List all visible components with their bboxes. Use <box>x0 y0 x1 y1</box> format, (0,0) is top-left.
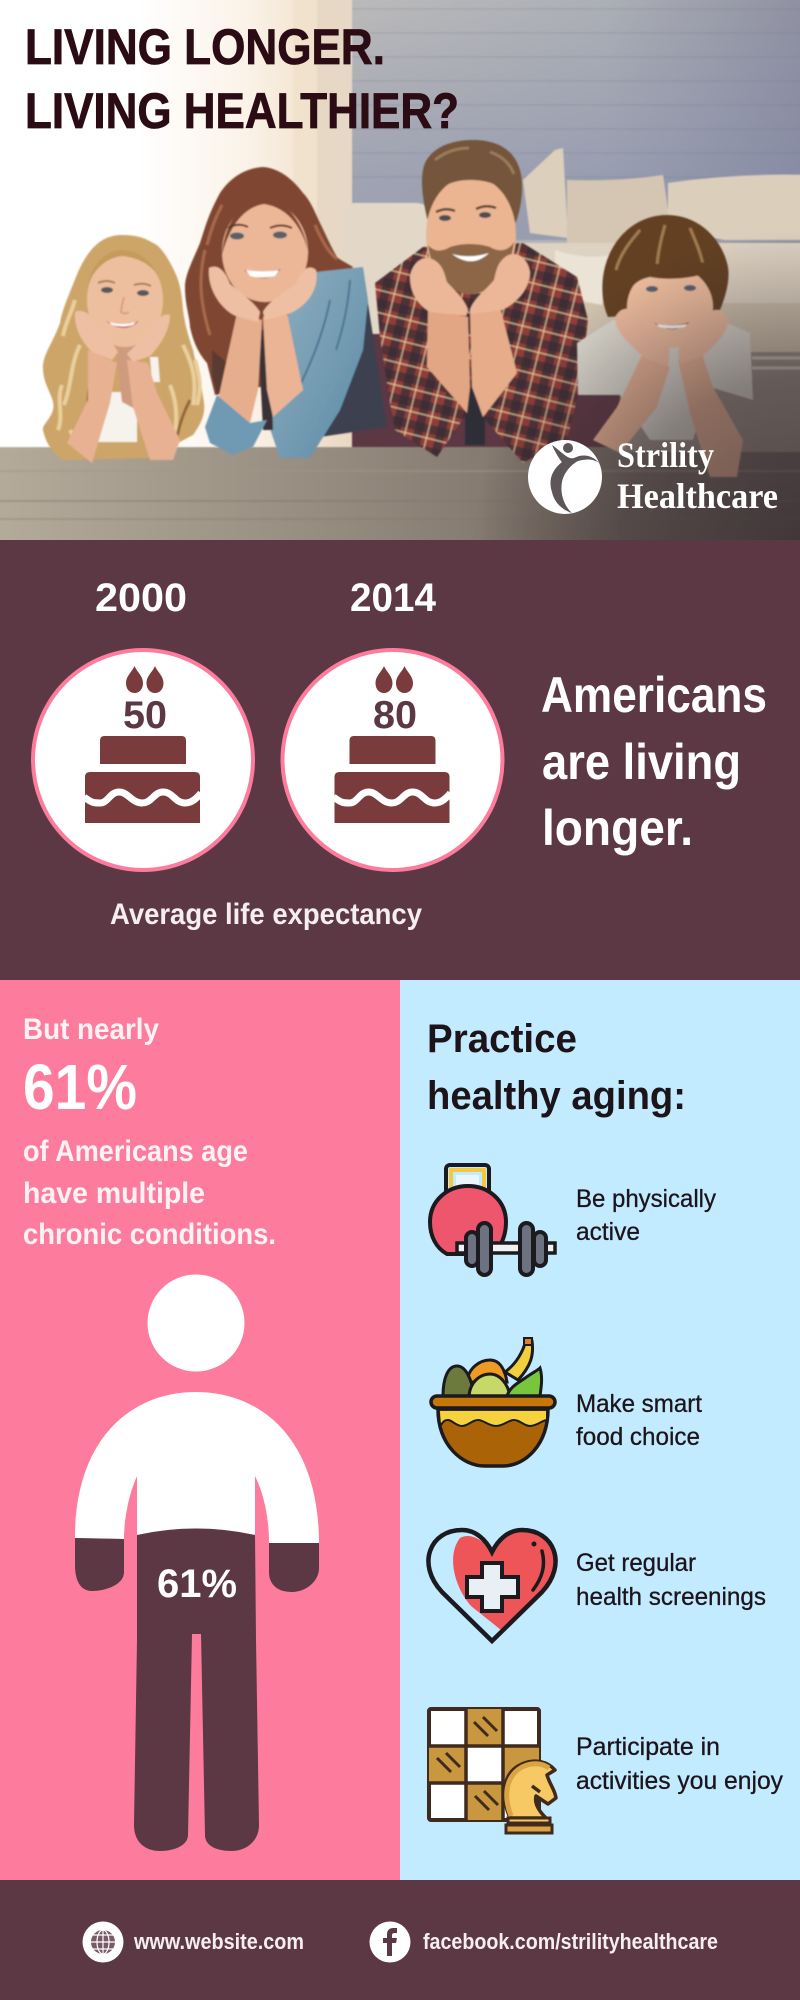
text: be physically active: active <box>576 1218 640 1246</box>
text: make smart food choice: food choice <box>576 1423 700 1451</box>
cake icon: 80 candles <box>282 650 502 870</box>
text: make smart food choice: Make smart <box>576 1390 702 1418</box>
title: LIVING LONGER. <box>25 19 385 75</box>
icon: facebook <box>370 1922 410 1962</box>
headline: Americans are living longer: are living <box>542 734 741 790</box>
title <box>28 28 457 129</box>
panel: life expectancy <box>0 540 800 980</box>
headline: Americans are living longer: longer. <box>542 800 693 856</box>
panel: healthy aging tips <box>400 980 800 1880</box>
person: son <box>577 215 753 477</box>
panel: chronic conditions <box>0 980 400 1880</box>
heading: practice healthy aging: Practice <box>427 1017 577 1061</box>
text: make smart food choice <box>576 1390 702 1451</box>
icon: chess board and knight <box>429 1709 556 1833</box>
person: girl <box>43 235 204 463</box>
label: 61% on figure: 61% <box>157 1562 237 1606</box>
icon: fruit bowl <box>431 1338 555 1466</box>
icon: kettlebell and dumbbell <box>430 1165 555 1275</box>
logo wordmark: Healthcare <box>617 476 778 516</box>
text: website: www.website.com <box>133 1929 304 1954</box>
logo wordmark: Strility <box>617 435 714 475</box>
text: facebook address: facebook.com/strilityhealthcare <box>423 1929 718 1954</box>
caption: average life expectancy: Average life expectancy <box>110 898 422 931</box>
heading: practice healthy aging <box>427 1017 686 1118</box>
icon: logo mark <box>528 440 602 514</box>
text: be physically active <box>576 1185 716 1246</box>
headline: Americans are living longer: Americans <box>541 667 767 723</box>
photo background: curtains, wall, sofa, floor <box>0 0 800 547</box>
icon: heart with medical cross <box>428 1530 556 1641</box>
text: but nearly: But nearly <box>23 1013 159 1046</box>
hero photo: family lying on the floor <box>0 0 800 550</box>
cake icon: 50 candles <box>33 650 253 870</box>
text: multiple chronic conditions: have multiple <box>23 1177 205 1210</box>
cake icon: 50 candles: 50 <box>123 694 167 737</box>
text: participate in activities: Participate in <box>576 1733 720 1761</box>
chart: human figure filled 61% <box>75 1274 319 1851</box>
text: be physically active: Be physically <box>576 1185 716 1213</box>
text: multiple chronic conditions <box>23 1135 276 1251</box>
photo vignette, bottom right <box>499 244 800 540</box>
icon: globe <box>82 1922 124 1962</box>
text: multiple chronic conditions: of Americans age <box>23 1135 248 1168</box>
footer <box>0 1880 800 2000</box>
stat: 61%: 61% <box>23 1051 137 1123</box>
heading: practice healthy aging: healthy aging: <box>427 1074 686 1118</box>
logo: Strility Healthcare <box>528 435 778 516</box>
text: participate in activities: activities you enjoy <box>576 1767 783 1795</box>
cake icon: 80 candles: 80 <box>373 694 417 737</box>
person: mother <box>185 167 387 458</box>
logo wordmark <box>618 442 778 508</box>
text: multiple chronic conditions: chronic conditions. <box>23 1218 276 1251</box>
year label: 2000: 2000 <box>95 576 187 620</box>
text: get regular health screenings: health screenings <box>576 1583 766 1611</box>
headline: Americans are living longer <box>541 667 767 856</box>
text: participate in activities <box>576 1733 783 1795</box>
title: LIVING HEALTHIER? <box>25 83 459 139</box>
year label: 2014: 2014 <box>350 576 437 620</box>
person: father <box>375 140 588 463</box>
text: get regular health screenings <box>576 1549 766 1611</box>
text: get regular health screenings: Get regular <box>576 1549 696 1577</box>
